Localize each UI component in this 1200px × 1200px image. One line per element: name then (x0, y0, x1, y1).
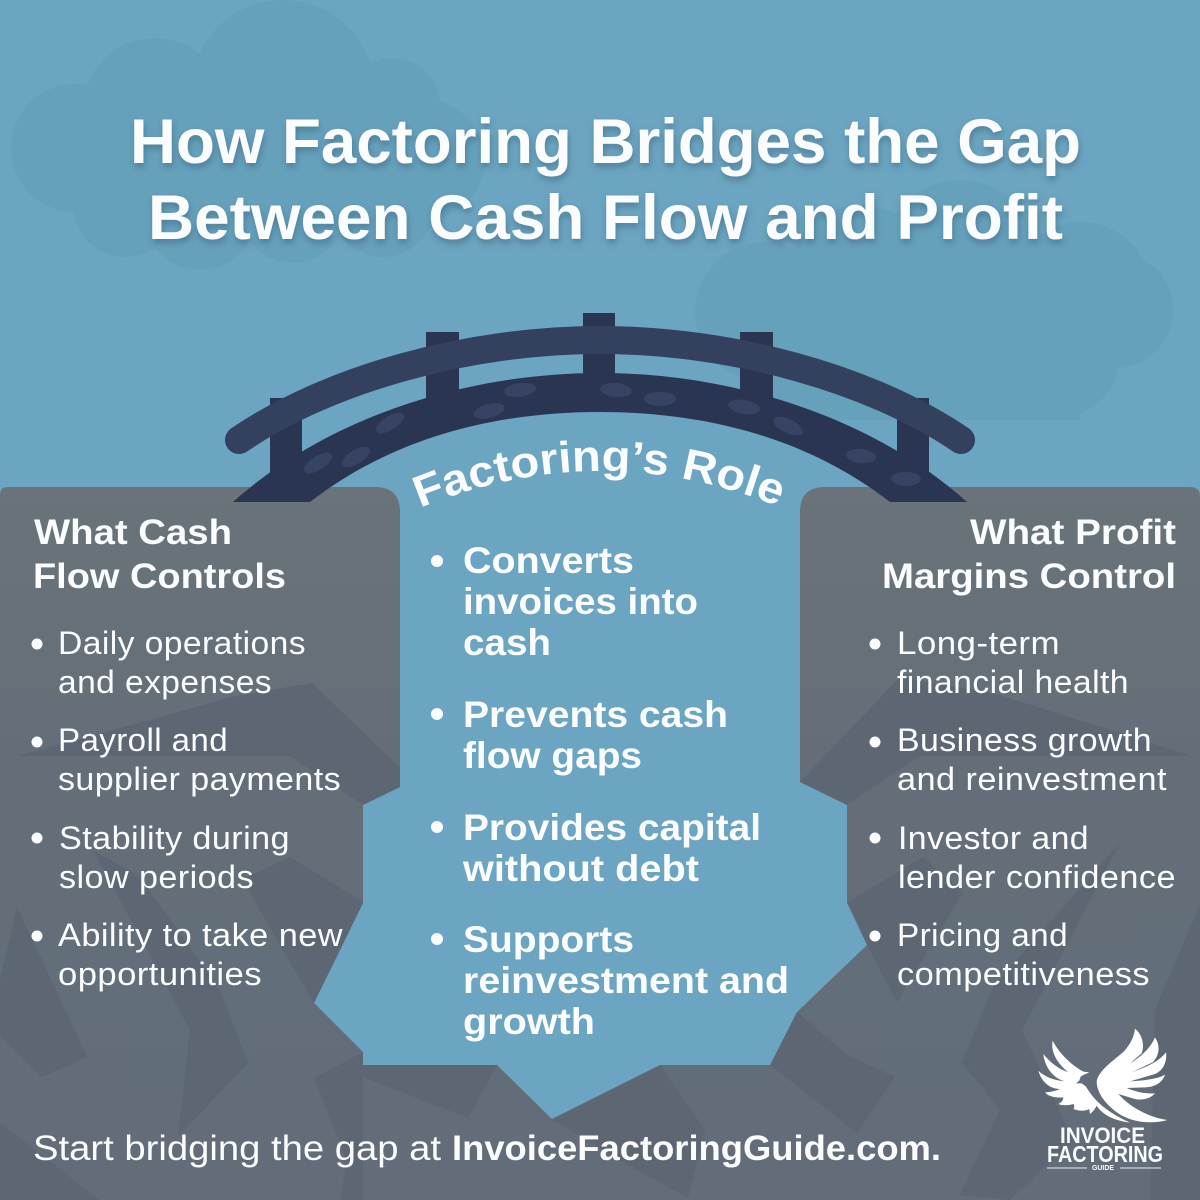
cloud: right (695, 180, 1173, 420)
heading: profit margins (882, 513, 1176, 596)
panel: factoring's role list: flow gaps (463, 735, 642, 776)
logo wordmark: GUIDE (1092, 1165, 1114, 1172)
title (130, 107, 1081, 253)
bridge posts (270, 313, 929, 478)
list: profit margin bullets: Pricing and (897, 917, 1068, 953)
logo wordmark: INVOICE (1060, 1123, 1145, 1148)
icon: phoenix (1038, 1029, 1167, 1123)
panel: factoring's role list: reinvestment and (463, 960, 789, 1001)
footer call to action: Start bridging the gap at (33, 1129, 441, 1168)
list: profit margin bullets: Investor and (898, 820, 1089, 856)
panel: what cash flow controls (32, 513, 344, 992)
heading: profit margins: Margins Control (882, 557, 1176, 596)
footer call to action (33, 1129, 941, 1168)
heading: profit margins: What Profit (970, 513, 1176, 552)
list: cash flow bullets: and expenses (58, 664, 272, 700)
heading: cash flow (33, 513, 286, 596)
bridge stones (301, 381, 921, 486)
logo wordmark (1047, 1123, 1163, 1172)
logo: Invoice Factoring Guide (1038, 1029, 1167, 1172)
panel: factoring's role list: Prevents cash (463, 694, 728, 735)
list: profit margin bullets: financial health (897, 664, 1129, 700)
bridge (233, 313, 967, 502)
title: How Factoring Bridges the Gap (130, 107, 1081, 177)
list: cash flow bullets (32, 625, 344, 992)
list: profit margin bullets: lender confidence (898, 859, 1176, 895)
list: cash flow bullets: opportunities (58, 956, 262, 992)
list: profit margin bullets (870, 625, 1176, 992)
panel: factoring's role list: Provides capital (463, 807, 761, 848)
panel: factoring's role list: invoices into (463, 581, 698, 622)
panel: factoring's role list: Supports (463, 919, 634, 960)
list: cash flow bullets: Ability to take new (58, 917, 344, 953)
bridge deck (233, 373, 967, 502)
logo wordmark: FACTORING (1047, 1141, 1163, 1167)
panel: factoring's role list: cash (463, 622, 551, 663)
title: Between Cash Flow and Profit (148, 183, 1063, 253)
heading: cash flow: Flow Controls (33, 557, 286, 596)
panel: factoring's role list: Converts (463, 540, 634, 581)
rocky ground panels (0, 487, 1200, 1200)
list: profit margin bullets: and reinvestment (897, 761, 1167, 797)
list: cash flow bullets: slow periods (59, 859, 254, 895)
panel: factoring's role list: growth (463, 1001, 595, 1042)
heading: Factoring's Role: Factoring’s Role (412, 440, 782, 507)
heading: cash flow: What Cash (34, 513, 232, 552)
panel: factoring's role list (431, 540, 789, 1042)
list: profit margin bullets: Long-term (897, 625, 1060, 661)
list: cash flow bullets: Daily operations (58, 625, 306, 661)
list: profit margin bullets: Business growth (897, 722, 1152, 758)
cloud: upper left (11, 0, 485, 270)
footer call to action: InvoiceFactoringGuide.com. (452, 1129, 941, 1168)
list: cash flow bullets: Stability during (59, 820, 290, 856)
list: profit margin bullets: competitiveness (897, 956, 1150, 992)
list: cash flow bullets: supplier payments (58, 761, 341, 797)
panel: factoring's role list: without debt (462, 848, 699, 889)
list: cash flow bullets: Payroll and (58, 722, 228, 758)
bridge handrail (239, 340, 961, 440)
panel: what profit margins control (870, 513, 1176, 992)
